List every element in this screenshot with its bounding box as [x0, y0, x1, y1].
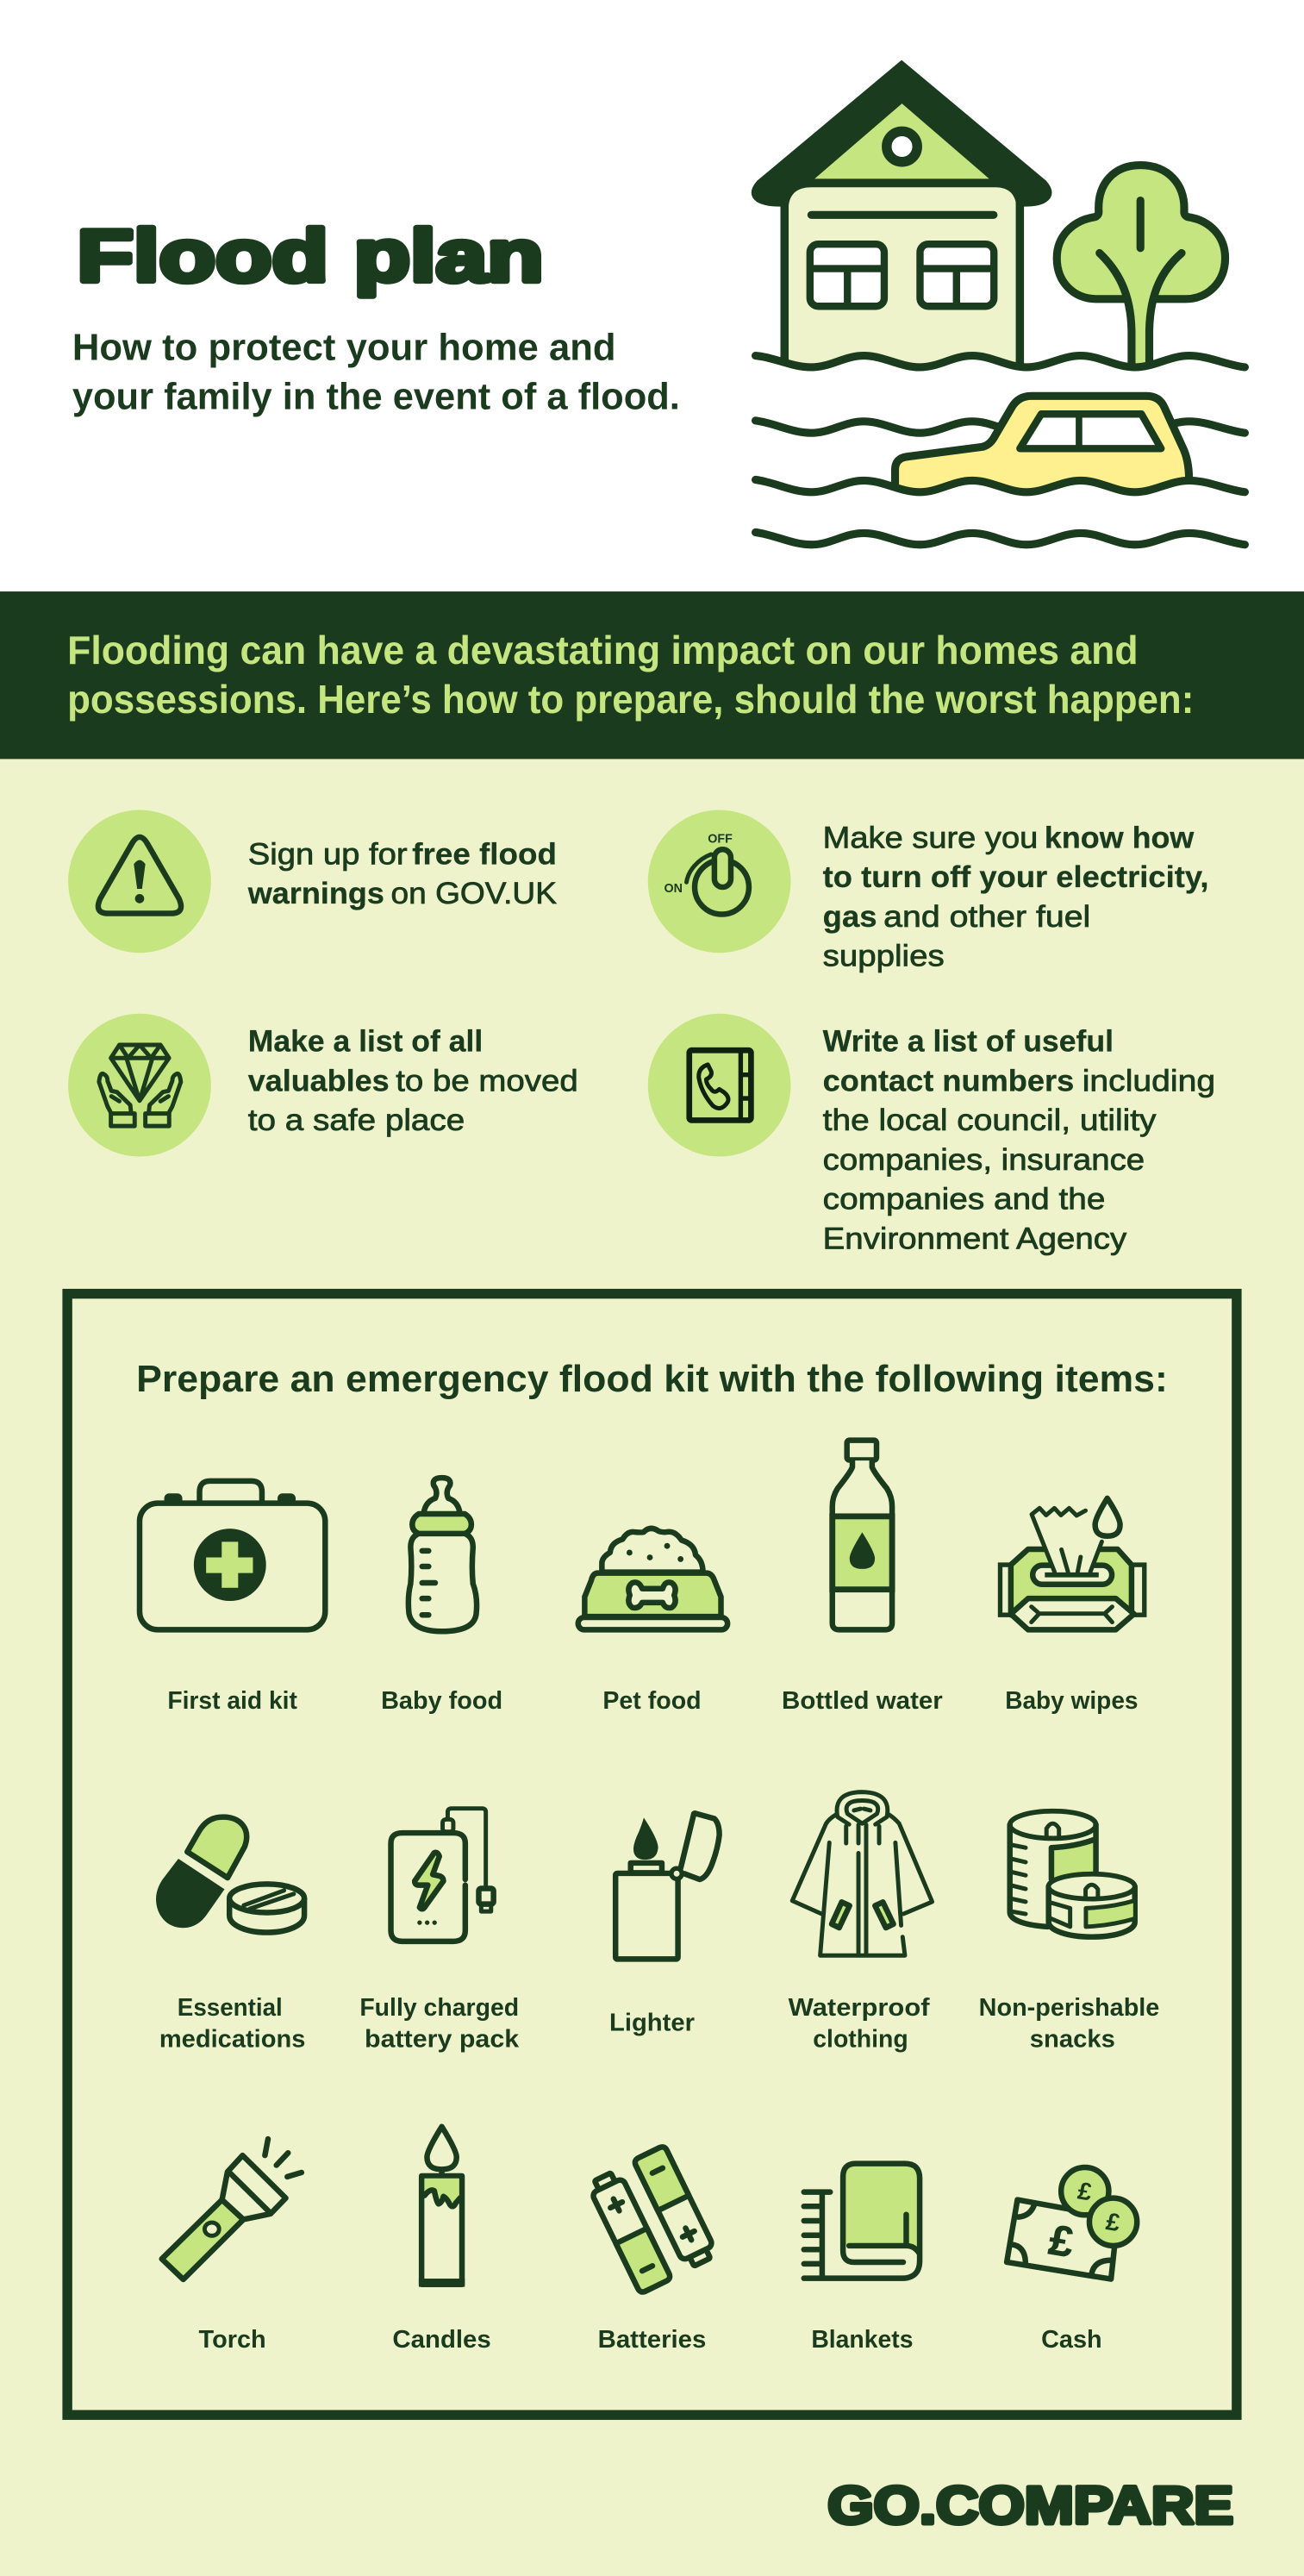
item: torch [162, 2139, 302, 2354]
wave 4 [756, 532, 1245, 545]
item: cash: £ [1045, 2216, 1077, 2267]
text: know how [1045, 821, 1195, 854]
item: bottled water [782, 1441, 943, 1715]
wave 1 [756, 356, 1245, 367]
item: blankets: Blankets [811, 2326, 913, 2354]
item: cash: £ [1076, 2177, 1094, 2207]
title: Flood plan [78, 215, 544, 297]
tip: list valuables [68, 1014, 578, 1157]
item: lighter [609, 1813, 720, 2036]
item: waterproof clothing: clothing [813, 2025, 908, 2053]
text: companies and the [823, 1183, 1105, 1216]
car [895, 396, 1189, 492]
wave 3 [756, 479, 1245, 492]
item: blankets [804, 2164, 920, 2354]
illustration: flooded house, tree and car [752, 60, 1245, 545]
banner text: possessions. Here’s how to prepare, should the worst happen: [67, 677, 1194, 722]
item: battery pack: Fully charged [359, 1994, 519, 2022]
text: warnings [247, 877, 384, 910]
wave 2 [756, 421, 1245, 433]
text: to be moved [396, 1064, 578, 1097]
text: and other fuel [883, 900, 1090, 934]
text: Make sure you [823, 821, 1038, 854]
text: companies, insurance [823, 1143, 1145, 1177]
item: baby food: Baby food [381, 1687, 502, 1715]
item: waterproof clothing: Waterproof [789, 1994, 930, 2022]
item: non-perishable snacks [979, 1811, 1159, 2053]
text: Sign up for [248, 837, 408, 871]
house [752, 60, 1051, 368]
text: on GOV.UK [391, 877, 557, 910]
text: valuables [248, 1064, 390, 1097]
item: waterproof clothing [789, 1792, 933, 2053]
text [823, 821, 1208, 973]
item: torch: Torch [199, 2326, 266, 2354]
tip: contact numbers [648, 1014, 1215, 1255]
item: pet food [578, 1529, 727, 1715]
panel heading: Prepare an emergency flood kit with the following items: [136, 1358, 1168, 1400]
item: batteries [587, 2145, 718, 2354]
tree [1057, 166, 1226, 365]
tip: turn off supplies [648, 810, 1208, 973]
text [823, 1025, 1215, 1255]
item: battery pack: battery pack [365, 2025, 519, 2053]
item: baby food [381, 1478, 502, 1715]
tip: flood warnings [68, 810, 557, 953]
panel: emergency flood kit [67, 1294, 1237, 2415]
text: to a safe place [248, 1104, 465, 1137]
item: first aid kit: First aid kit [167, 1687, 297, 1715]
item: lighter: Lighter [609, 2009, 695, 2036]
text [247, 837, 557, 910]
icon: power switch: ON [664, 882, 683, 896]
text [248, 1025, 578, 1137]
item: bottled water: Bottled water [782, 1687, 943, 1715]
text: Make a list of all [248, 1025, 483, 1059]
icon: warning triangle [68, 810, 211, 953]
item: cash: Cash [1041, 2326, 1102, 2354]
item: essential medications: Essential [178, 1994, 283, 2022]
subtitle [72, 326, 680, 418]
subtitle: How to protect your home and [72, 326, 616, 368]
item: cash [1007, 2167, 1137, 2354]
icon: power switch: OFF [708, 833, 733, 847]
item: first aid kit [140, 1481, 325, 1715]
logo: GO.COMPARE [827, 2476, 1233, 2535]
subtitle: your family in the event of a flood. [72, 376, 680, 418]
icon: diamond in hands [68, 1014, 211, 1157]
item: candles: Candles [392, 2326, 491, 2354]
item: essential medications: medications [159, 2025, 305, 2053]
item: baby wipes: Baby wipes [1005, 1687, 1139, 1715]
text: the local council, utility [823, 1104, 1157, 1137]
item: non-perishable snacks: Non-perishable [979, 1994, 1159, 2022]
item: essential medications [156, 1817, 305, 2053]
text: gas [823, 900, 877, 934]
item: baby wipes [1000, 1498, 1145, 1715]
icon: power switch [648, 810, 791, 953]
item: non-perishable snacks: snacks [1030, 2025, 1115, 2053]
text: supplies [823, 940, 945, 973]
text: free flood [412, 837, 557, 871]
text: contact numbers [823, 1064, 1074, 1097]
item: candles [392, 2127, 491, 2354]
text: to turn off your electricity, [823, 860, 1208, 894]
banner text [67, 628, 1194, 722]
text: including [1083, 1064, 1215, 1097]
text: Environment Agency [823, 1222, 1127, 1255]
item: cash: £ [1104, 2208, 1122, 2237]
item: battery pack [359, 1809, 519, 2053]
item: batteries: Batteries [598, 2326, 706, 2354]
item: pet food: Pet food [602, 1687, 702, 1715]
banner text: Flooding can have a devastating impact on our homes and [67, 628, 1139, 672]
text: Write a list of useful [823, 1025, 1114, 1059]
icon: phone book [648, 1014, 791, 1157]
